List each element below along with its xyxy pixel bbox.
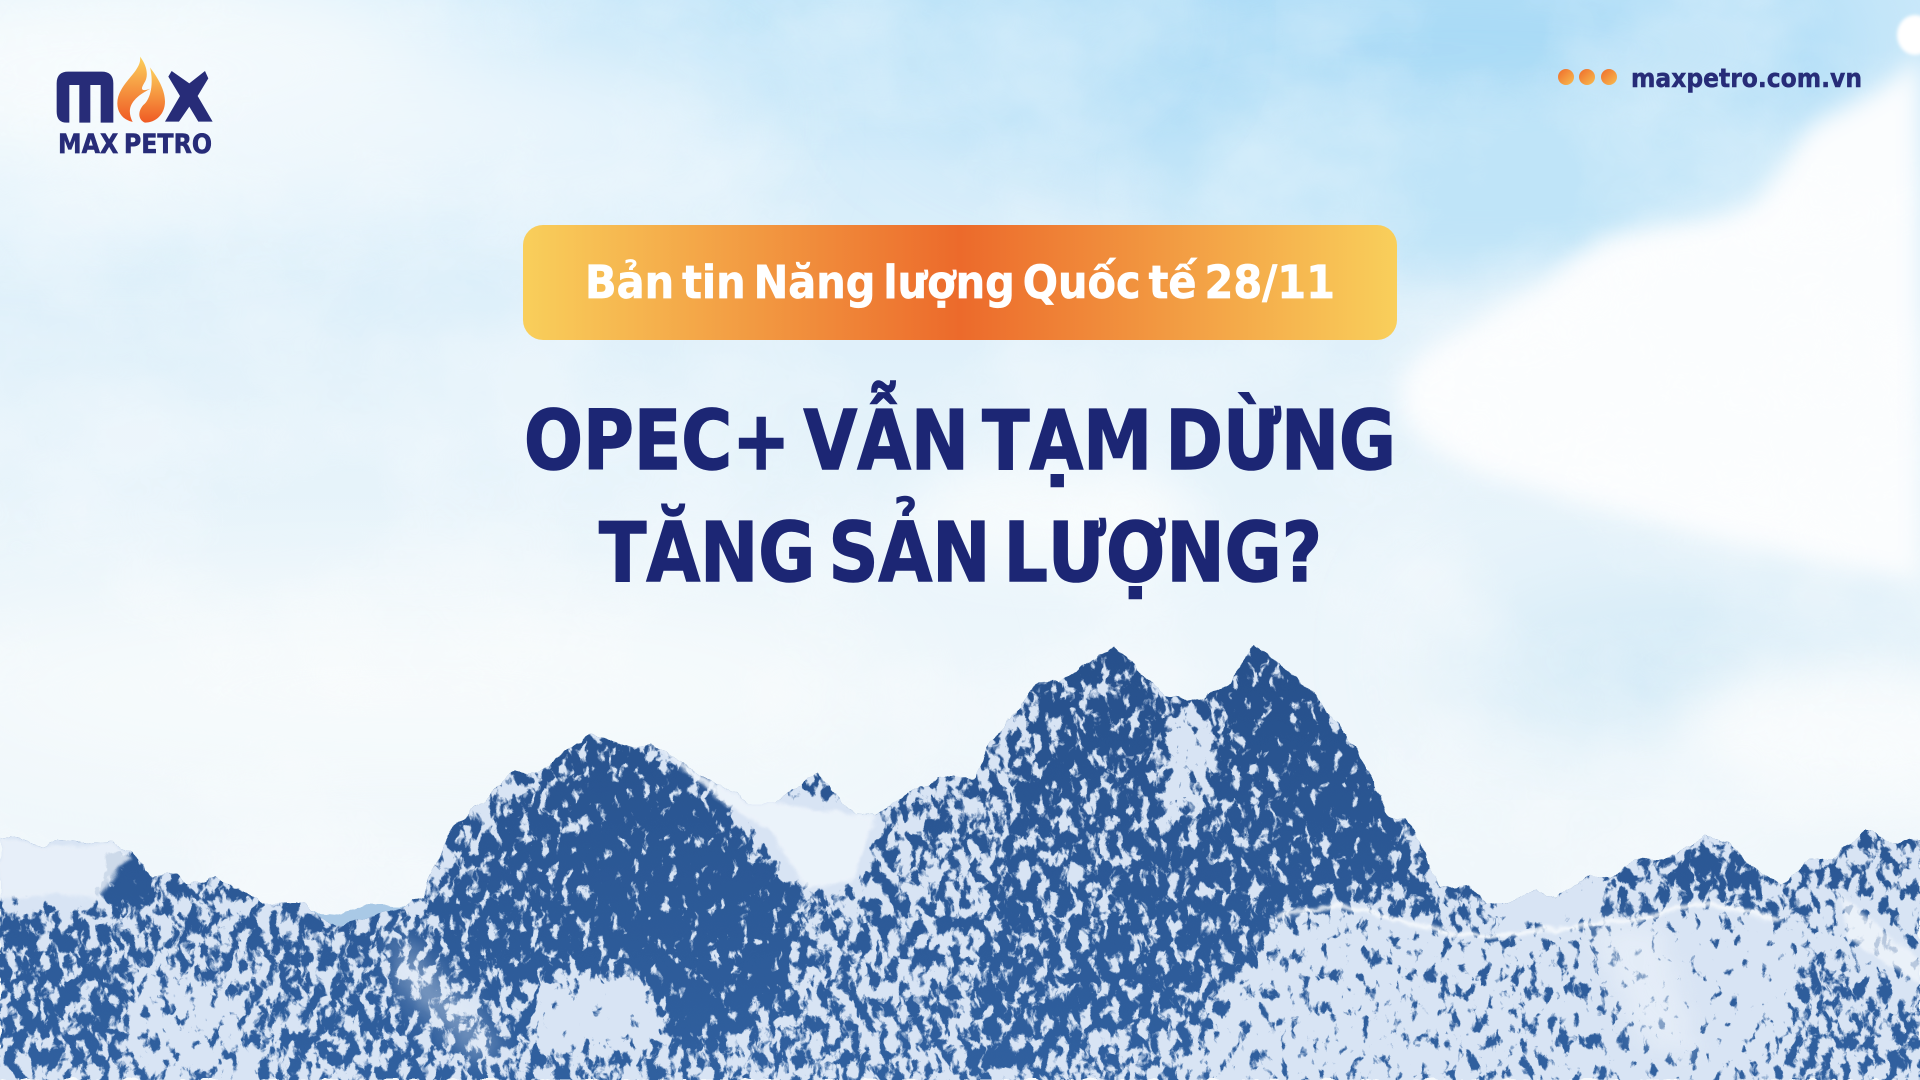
headline badge: [523, 225, 1397, 340]
title line two: TĂNG SẢN LƯỢNG?: [599, 496, 1322, 601]
three orange dots: [1558, 69, 1617, 85]
letter m: [57, 72, 113, 123]
website tag: [1558, 64, 1862, 94]
sunlit slope lower right: [1590, 925, 1700, 1060]
sunlit slope far right: [1840, 895, 1920, 985]
bright snow saddle: [652, 743, 876, 890]
distant pale peak: [312, 905, 430, 960]
website address: maxpetro.com.vn: [1631, 64, 1862, 94]
logo: Max Petro: [57, 57, 213, 160]
large white cloud at right: [1400, 55, 1920, 580]
badge background: [523, 225, 1397, 340]
logo wordmark: MAX PETRO: [58, 129, 212, 160]
badge text: Bản tin Năng lượng Quốc tế 28/11: [585, 256, 1335, 309]
rock base of the range: [0, 620, 1920, 1080]
front ridge snow band: [1278, 903, 1780, 935]
title line one: OPEC+ VẪN TẠM DỪNG: [524, 381, 1396, 489]
snow spine lower left: [395, 930, 500, 1060]
snow and rock texture: [0, 620, 1920, 1080]
logo mark: [57, 57, 213, 123]
letter x: [165, 71, 213, 122]
main title: [524, 381, 1396, 601]
snowfield on left ridge: [0, 835, 130, 900]
flame: [117, 57, 165, 123]
mountain range: [0, 620, 1920, 1080]
